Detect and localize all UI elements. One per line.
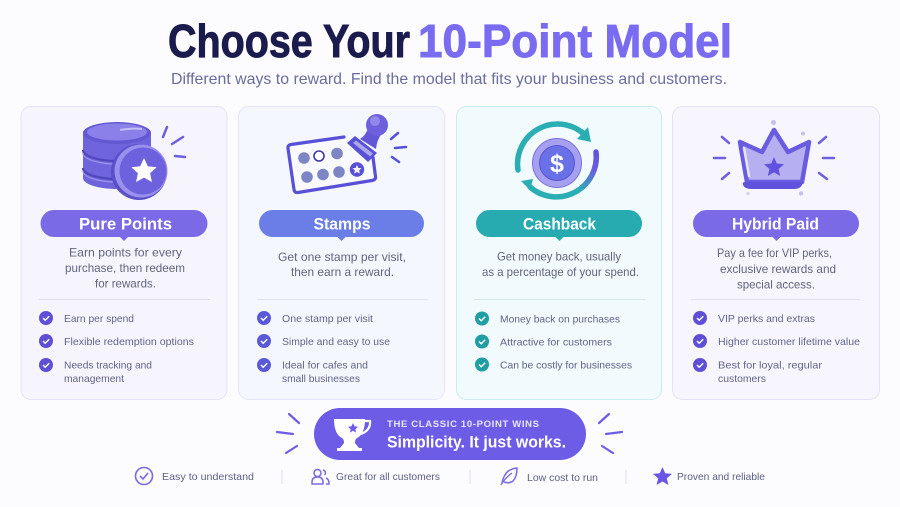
feature list: Ideal for cafes and bbox=[282, 360, 368, 372]
icon: coin stack bbox=[83, 122, 185, 200]
feature list: Simple and easy to use bbox=[282, 336, 390, 348]
icon: stamp card bbox=[288, 114, 406, 193]
feature list: small businesses bbox=[282, 373, 360, 385]
feature list: Best for loyal, regular bbox=[718, 360, 823, 372]
feature list: Higher customer lifetime value bbox=[718, 336, 860, 348]
label pill: cashback bbox=[476, 210, 642, 241]
feature list: Attractive for customers bbox=[500, 336, 612, 348]
feature list: VIP perks and extras bbox=[718, 313, 815, 325]
benefit: proven and reliable bbox=[653, 467, 765, 485]
icon: trophy bbox=[334, 419, 370, 451]
description: exclusive rewards and bbox=[720, 262, 836, 276]
label pill: stamps bbox=[259, 210, 424, 241]
description bbox=[278, 250, 406, 279]
feature list bbox=[475, 312, 632, 372]
label pill: stamps: Stamps bbox=[314, 216, 370, 234]
icon: crown bbox=[714, 120, 834, 196]
description: for rewards. bbox=[95, 276, 156, 290]
subtitle: Different ways to reward. Find the model that fits your business and customers. bbox=[171, 71, 727, 88]
icon: cashback coin: $ bbox=[550, 150, 564, 178]
benefit: easy to understand bbox=[136, 468, 254, 484]
panel: stamps bbox=[238, 106, 444, 400]
description: as a percentage of your spend. bbox=[482, 265, 639, 279]
description: Get one stamp per visit, bbox=[278, 250, 406, 264]
description: special access. bbox=[737, 278, 815, 292]
benefit: great for all customers bbox=[312, 470, 440, 484]
title bbox=[168, 15, 732, 67]
description: Earn points for every bbox=[69, 246, 182, 260]
benefit: low cost to run bbox=[501, 468, 598, 485]
benefit: low cost to run: Low cost to run bbox=[527, 472, 598, 484]
panel: pure points bbox=[21, 106, 227, 400]
feature list bbox=[693, 311, 860, 385]
feature list: Can be costly for businesses bbox=[500, 360, 632, 372]
callout banner: Simplicity. It just works. bbox=[387, 432, 566, 452]
panel: cashback bbox=[456, 106, 662, 400]
callout banner bbox=[314, 408, 586, 460]
benefit: great for all customers: Great for all customers bbox=[336, 471, 440, 483]
feature list: management bbox=[64, 373, 124, 385]
feature list bbox=[39, 311, 194, 385]
description: then earn a reward. bbox=[291, 265, 394, 279]
feature list: Money back on purchases bbox=[500, 314, 620, 326]
description: Pay a fee for VIP perks, bbox=[717, 246, 832, 260]
feature list: One stamp per visit bbox=[282, 313, 373, 325]
feature list: customers bbox=[718, 373, 766, 385]
panel: hybrid paid bbox=[672, 106, 880, 400]
description bbox=[482, 250, 639, 279]
label pill: cashback: Cashback bbox=[523, 216, 597, 234]
description bbox=[717, 246, 836, 292]
feature list: Earn per spend bbox=[64, 313, 134, 325]
benefit: proven and reliable: Proven and reliable bbox=[677, 471, 765, 483]
rays: right of banner bbox=[599, 414, 622, 453]
rays: left of banner bbox=[277, 414, 299, 453]
label pill: hybrid paid: Hybrid Paid bbox=[732, 216, 819, 234]
title: Choose Your bbox=[168, 15, 410, 67]
benefit: easy to understand: Easy to understand bbox=[162, 471, 254, 483]
description: purchase, then redeem bbox=[65, 261, 185, 275]
description: Get money back, usually bbox=[497, 250, 621, 264]
feature list: Flexible redemption options bbox=[64, 336, 194, 348]
label pill: pure points: Pure Points bbox=[79, 216, 172, 234]
icon: cashback coin bbox=[518, 124, 596, 197]
description bbox=[65, 246, 185, 290]
feature list: Needs tracking and bbox=[64, 360, 152, 372]
feature list bbox=[257, 311, 390, 385]
callout banner: THE CLASSIC 10-POINT WINS bbox=[387, 419, 539, 430]
label pill: pure points bbox=[40, 210, 208, 241]
title: 10-Point Model bbox=[418, 15, 732, 67]
label pill: hybrid paid bbox=[693, 210, 859, 241]
